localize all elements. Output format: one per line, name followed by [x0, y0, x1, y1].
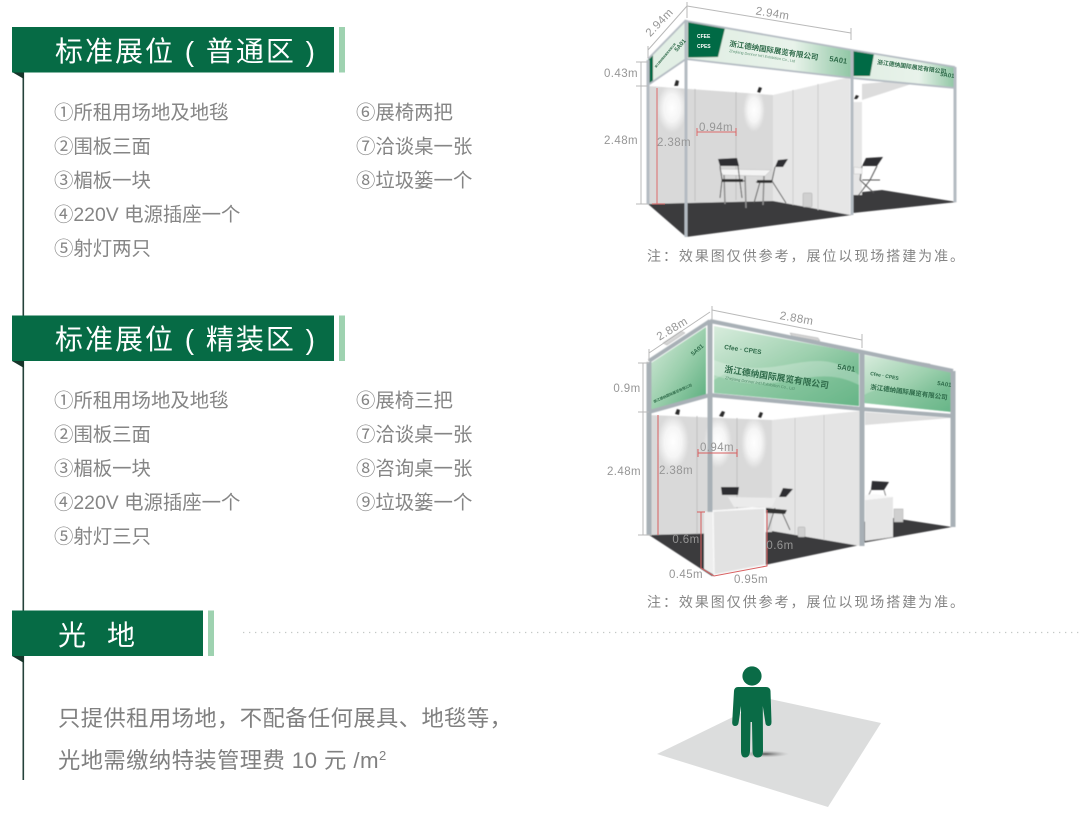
fascia text: fitted booth: 浙江德纳国际展览有限公司: [652, 382, 693, 404]
timeline rule: [22, 72, 24, 780]
list: regular zone left column: ④220V 电源插座一个: [54, 204, 240, 226]
heading: standard booth, regular zone: [12, 27, 345, 79]
list: regular zone left column: ⑤射灯两只: [54, 238, 151, 260]
dimension lines: fitted booth: 0.94m: [700, 442, 734, 454]
list: regular zone right column: ⑥展椅两把: [356, 102, 453, 124]
dimension lines: regular booth: 2.48m: [604, 135, 638, 147]
list: fitted zone left column: ③楣板一块: [54, 458, 151, 480]
list: fitted zone right column: ⑥展椅三把: [356, 390, 453, 412]
dimension lines: fitted booth: 0.45m: [669, 569, 703, 581]
fascia text: fitted booth: Zhejiang Donnor Int'l Exhibition Co., Ltd: [725, 375, 795, 391]
booth illustration: regular zone: [604, 2, 957, 237]
fascia text: fitted booth: 5A01: [690, 343, 706, 358]
fascia text: regular booth: 浙江德纳国际展览有限公司: [729, 38, 819, 62]
note: fitted booth: 注：效果图仅供参考，展位以现场搭建为准。: [647, 594, 966, 610]
list: regular zone right column: ⑦洽谈桌一张: [356, 136, 472, 158]
list: fitted zone right column: ⑦洽谈桌一张: [356, 424, 472, 446]
list: regular zone left column: [54, 102, 240, 260]
list: fitted zone right column: ⑨垃圾篓一个: [356, 492, 472, 514]
dimension lines: fitted booth: 0.6m: [766, 540, 794, 552]
text block: raw space description: 2: [379, 748, 387, 763]
fascia text: fitted booth: [652, 343, 952, 404]
list: regular zone left column: ③楣板一块: [54, 170, 151, 192]
list: fitted zone left column: ⑤射灯三只: [54, 526, 151, 548]
dimension lines: regular booth: 2.94m: [755, 5, 790, 23]
fascia text: regular booth: Zhejiang Donnor Int'l Exhibition Co., Ltd: [729, 49, 795, 63]
fascia text: regular booth: 5A01: [674, 38, 688, 53]
fascia text: fitted booth: 5A01: [837, 362, 856, 374]
fascia text: fitted booth: Cfee · CPES: [870, 371, 900, 382]
dimension lines: regular booth: 2.38m: [657, 137, 691, 149]
heading: raw space: 光地: [58, 620, 156, 651]
dimension lines: fitted booth: 2.38m: [659, 465, 693, 477]
booth illustration: fitted zone: [607, 306, 953, 586]
icon: person: [732, 666, 772, 758]
fascia text: regular booth: 5A01: [829, 54, 848, 66]
fascia text: regular booth: CPES: [697, 44, 711, 50]
fascia text: fitted booth: 浙江德纳国际展览有限公司: [724, 363, 830, 390]
dimension lines: fitted booth: 2.88m: [655, 316, 690, 343]
fascia text: fitted booth: 浙江德纳国际展览有限公司: [870, 382, 948, 402]
list: regular zone left column: ①所租用场地及地毯: [54, 102, 229, 124]
text block: raw space description: 只提供租用场地，不配备任何展具、地毯等，: [58, 706, 512, 731]
dimension lines: regular booth: 0.43m: [604, 68, 638, 80]
list: fitted zone right column: ⑧咨询桌一张: [356, 458, 472, 480]
list: fitted zone left column: [54, 390, 240, 548]
heading: raw space: [12, 610, 214, 663]
fascia text: regular booth: CFEE: [697, 34, 711, 40]
list: fitted zone left column: ①所租用场地及地毯: [54, 390, 229, 412]
fascia text: regular booth: 5A01: [940, 72, 955, 80]
dimension lines: fitted booth: 0.6m: [672, 534, 700, 546]
list: fitted zone left column: ④220V 电源插座一个: [54, 492, 240, 514]
person shadow: [741, 750, 789, 758]
list: regular zone left column: ②围板三面: [54, 136, 151, 158]
dimension lines: fitted booth: [607, 306, 862, 586]
text block: raw space description: 光地需缴纳特装管理费 10 元 /m: [58, 748, 379, 773]
heading: standard booth, fitted zone: [12, 316, 345, 368]
dimension lines: regular booth: 0.94m: [699, 122, 733, 134]
list: regular zone right column: ⑧垃圾篓一个: [356, 170, 472, 192]
fascia text: regular booth: 浙江德纳国际展览有限公司: [877, 58, 947, 76]
text block: raw space description: [58, 706, 512, 773]
list: regular zone right column: [356, 102, 472, 192]
floor plane: [657, 699, 881, 807]
list: fitted zone right column: [356, 390, 472, 514]
fascia text: regular booth: [654, 34, 955, 80]
fascia text: fitted booth: 5A01: [937, 381, 952, 389]
fascia text: fitted booth: Cfee · CPES: [724, 344, 763, 356]
dimension lines: fitted booth: 0.95m: [734, 574, 768, 586]
dotted divider: [243, 632, 1080, 634]
heading: standard booth, fitted zone: 标准展位 ( 精装区 ): [55, 324, 317, 355]
note: regular booth: 注：效果图仅供参考，展位以现场搭建为准。: [647, 248, 966, 264]
fascia text: regular booth: 浙江德纳国际展览有限公司: [654, 42, 677, 69]
heading: standard booth, regular zone: 标准展位 ( 普通区 ): [55, 36, 317, 67]
illustration: person on raw floor: [657, 666, 881, 807]
dimension lines: fitted booth: 0.9m: [613, 383, 641, 395]
dimension lines: regular booth: 2.94m: [644, 7, 676, 39]
list: fitted zone left column: ②围板三面: [54, 424, 151, 446]
dimension lines: fitted booth: 2.48m: [607, 466, 641, 478]
dimension lines: fitted booth: 2.88m: [779, 310, 814, 328]
dimension lines: regular booth: [604, 2, 851, 204]
